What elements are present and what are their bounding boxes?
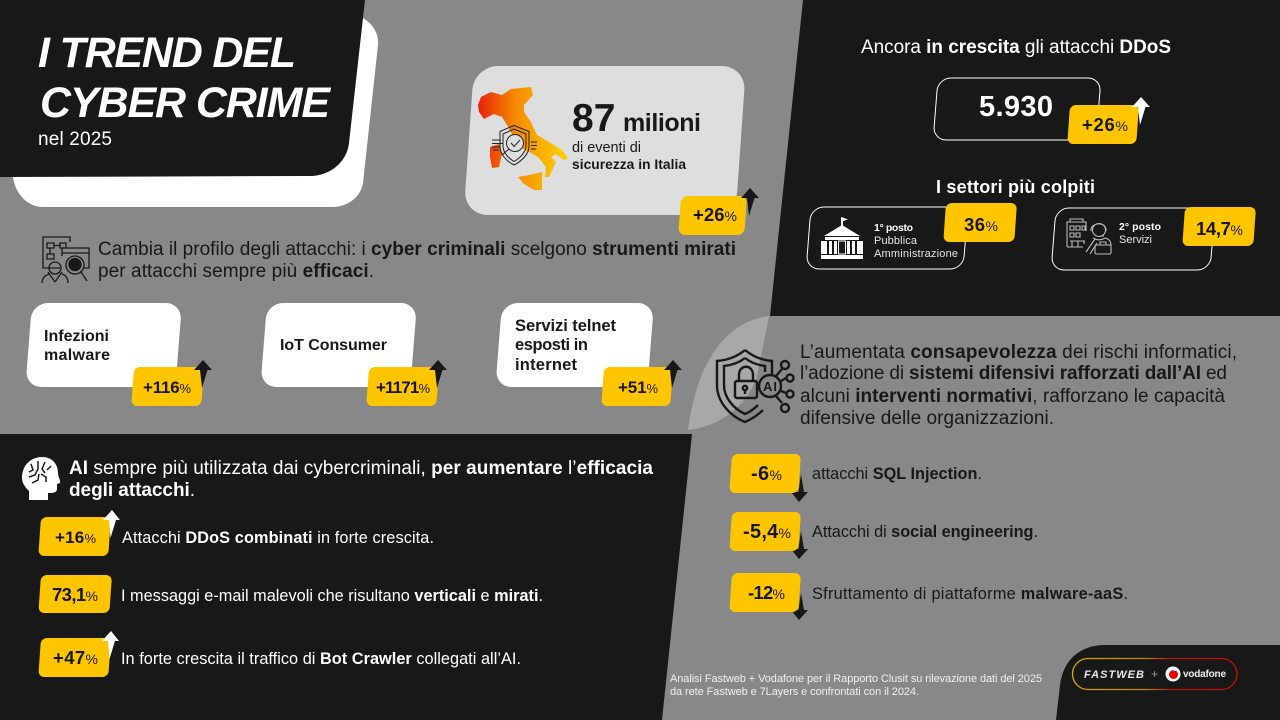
arrow up white bbox=[103, 510, 120, 538]
panel: iot consumer bbox=[260, 303, 447, 406]
badge +116%: +116% bbox=[143, 378, 191, 397]
text: awareness paragraph: l’adozione di sistemi difensivi rafforzati dall’AI ed bbox=[800, 363, 1227, 384]
card caption: di eventi di bbox=[572, 140, 641, 156]
card caption: sicurezza in Italia bbox=[572, 157, 686, 172]
badge +1171% bbox=[366, 367, 439, 406]
badge +47%: +47% bbox=[53, 647, 98, 668]
label bbox=[44, 328, 110, 364]
panel: title block bbox=[0, 0, 378, 207]
item: email malevole bbox=[38, 575, 543, 613]
text: awareness paragraph bbox=[800, 342, 1237, 429]
logo pill outline bbox=[1072, 658, 1237, 690]
badge +16%: +16% bbox=[55, 528, 96, 547]
badge +116% bbox=[131, 367, 204, 406]
text: attack profile: per attacchi sempre più efficaci. bbox=[98, 261, 374, 282]
white title backing bbox=[13, 18, 378, 207]
description: In forte crescita il traffico di Bot Crawler collegati all’AI. bbox=[121, 650, 521, 668]
title bbox=[38, 29, 331, 127]
badge -6%: -6% bbox=[751, 463, 782, 485]
text: awareness paragraph: L’aumentata consapevolezza dei rischi informatici, bbox=[800, 342, 1237, 363]
panel: servizi telnet bbox=[495, 303, 682, 406]
icon: head with circuits bbox=[22, 457, 60, 500]
badge -5,4% bbox=[729, 512, 801, 551]
heading: Ancora in crescita gli attacchi DDoS bbox=[861, 37, 1171, 58]
icon: italy map with shield bbox=[478, 87, 568, 190]
badge +51% bbox=[601, 367, 673, 406]
text: awareness paragraph: alcuni interventi normativi, rafforzano le capacità bbox=[800, 386, 1225, 407]
card bbox=[25, 303, 182, 387]
subtitle: nel 2025 bbox=[38, 129, 112, 150]
arrow up bbox=[664, 360, 682, 388]
label bbox=[515, 317, 616, 374]
panel: infezioni malware bbox=[25, 303, 212, 406]
label: Servizi telnet bbox=[515, 317, 616, 335]
panel: bottom left dark area bbox=[0, 434, 692, 720]
badge +1171%: +1171% bbox=[376, 378, 430, 397]
description: Attacchi di social engineering. bbox=[812, 523, 1038, 541]
text: attack profile bbox=[98, 239, 736, 282]
label bbox=[874, 222, 958, 260]
description: I messaggi e-mail malevoli che risultano verticali e mirati. bbox=[121, 587, 543, 605]
text: AI heading bbox=[69, 458, 653, 501]
panel: ddos bbox=[861, 37, 1171, 144]
badge 14,7%: 14,7% bbox=[1196, 218, 1243, 239]
label: Infezioni bbox=[44, 328, 109, 345]
description: Attacchi DDoS combinati in forte crescita. bbox=[122, 529, 434, 547]
arrow up white bbox=[1132, 97, 1150, 125]
item: bot crawler bbox=[38, 631, 521, 677]
arrow down bbox=[791, 593, 808, 620]
label: Servizi bbox=[1119, 234, 1152, 246]
badge -6% bbox=[729, 454, 801, 493]
label: 1° posto bbox=[874, 222, 913, 234]
card bbox=[260, 303, 417, 387]
badge +26%: +26% bbox=[1082, 114, 1128, 135]
panel: top right dark area bbox=[770, 0, 1280, 316]
plus sign: + bbox=[1151, 667, 1158, 681]
description: Sfruttamento di piattaforme malware-aaS. bbox=[812, 585, 1128, 603]
title: I TREND DEL bbox=[38, 29, 296, 77]
vodafone mark bbox=[1166, 666, 1180, 682]
badge +26%: +26% bbox=[693, 204, 737, 225]
badge +26% bbox=[1067, 105, 1139, 144]
badge 73,1% bbox=[38, 575, 112, 613]
icon: office and operator bbox=[1067, 219, 1111, 254]
label: malware bbox=[44, 347, 110, 364]
text: awareness paragraph: difensive delle organizzazioni. bbox=[800, 408, 1054, 429]
item: ddos combinati bbox=[38, 510, 434, 556]
label: Amministrazione bbox=[874, 248, 958, 260]
panel: sector services bbox=[1051, 207, 1256, 270]
outlined card bbox=[1051, 208, 1215, 270]
text: AI heading: AI sempre più utilizzata dai cybercriminali, per aumentare l’efficacia bbox=[69, 458, 653, 479]
fastweb wordmark: FASTWEB bbox=[1084, 669, 1144, 681]
decorative lens overlap bbox=[688, 316, 769, 430]
badge -12%: -12% bbox=[748, 582, 785, 603]
label bbox=[1119, 221, 1161, 246]
item: social engineering bbox=[729, 512, 1038, 559]
text: attack profile: Cambia il profilo degli attacchi: i cyber criminali scelgono strumenti mirati bbox=[98, 239, 736, 260]
panel: 87 milioni card bbox=[464, 66, 759, 235]
arrow up bbox=[741, 188, 759, 216]
title: CYBER CRIME bbox=[40, 79, 331, 127]
heading: sectors: I settori più colpiti bbox=[936, 177, 1095, 197]
label: IoT Consumer bbox=[280, 337, 387, 354]
badge +47% bbox=[38, 638, 111, 677]
badge -5,4%: -5,4% bbox=[743, 521, 791, 543]
badge 73,1%: 73,1% bbox=[52, 584, 98, 605]
footnote bbox=[670, 673, 1042, 698]
label: Pubblica bbox=[874, 235, 918, 247]
badge 14,7% bbox=[1182, 207, 1256, 246]
card caption bbox=[572, 140, 686, 172]
card bbox=[495, 303, 654, 387]
badge 36% bbox=[943, 203, 1017, 242]
arrow up bbox=[194, 360, 212, 388]
icon: shield with AI bbox=[717, 350, 794, 422]
icon: shield with AI: AI bbox=[763, 379, 777, 394]
outlined card bbox=[806, 207, 968, 269]
card background bbox=[464, 66, 746, 215]
label: esposti in bbox=[515, 336, 588, 354]
footnote: Analisi Fastweb + Vodafone per il Rapporto Clusit su rilevazione dati del 2025 bbox=[670, 673, 1042, 685]
label: 2° posto bbox=[1119, 221, 1161, 233]
outlined card bbox=[933, 78, 1101, 140]
item: sql injection bbox=[729, 454, 982, 502]
vodafone wordmark: vodafone bbox=[1183, 669, 1226, 680]
badge +51%: +51% bbox=[618, 378, 658, 397]
badge 36%: 36% bbox=[964, 214, 998, 235]
big number: milioni bbox=[623, 109, 701, 137]
description: attacchi SQL Injection. bbox=[812, 465, 982, 483]
text: AI heading: degli attacchi. bbox=[69, 480, 195, 501]
dark title backing bbox=[0, 0, 365, 177]
panel: sector public administration bbox=[806, 203, 1017, 269]
arrow up white bbox=[102, 631, 119, 659]
badge +16% bbox=[38, 517, 111, 556]
logos: fastweb and vodafone bbox=[1072, 658, 1237, 690]
arrow up bbox=[429, 360, 447, 388]
label: internet bbox=[515, 356, 578, 374]
arrow down bbox=[791, 531, 808, 559]
panel: bottom right logo area bbox=[1056, 645, 1280, 720]
badge +26% bbox=[678, 196, 747, 235]
item: malware as a service bbox=[729, 573, 1128, 620]
footnote: da rete Fastweb e 7Layers e confrontati con il 2024. bbox=[670, 686, 919, 698]
icon: government building bbox=[821, 217, 863, 259]
big number: 87 bbox=[572, 97, 615, 140]
arrow down bbox=[791, 474, 808, 502]
value: 5.930 bbox=[979, 91, 1053, 123]
badge -12% bbox=[729, 573, 801, 612]
icon: cyber analysis bbox=[42, 237, 89, 283]
